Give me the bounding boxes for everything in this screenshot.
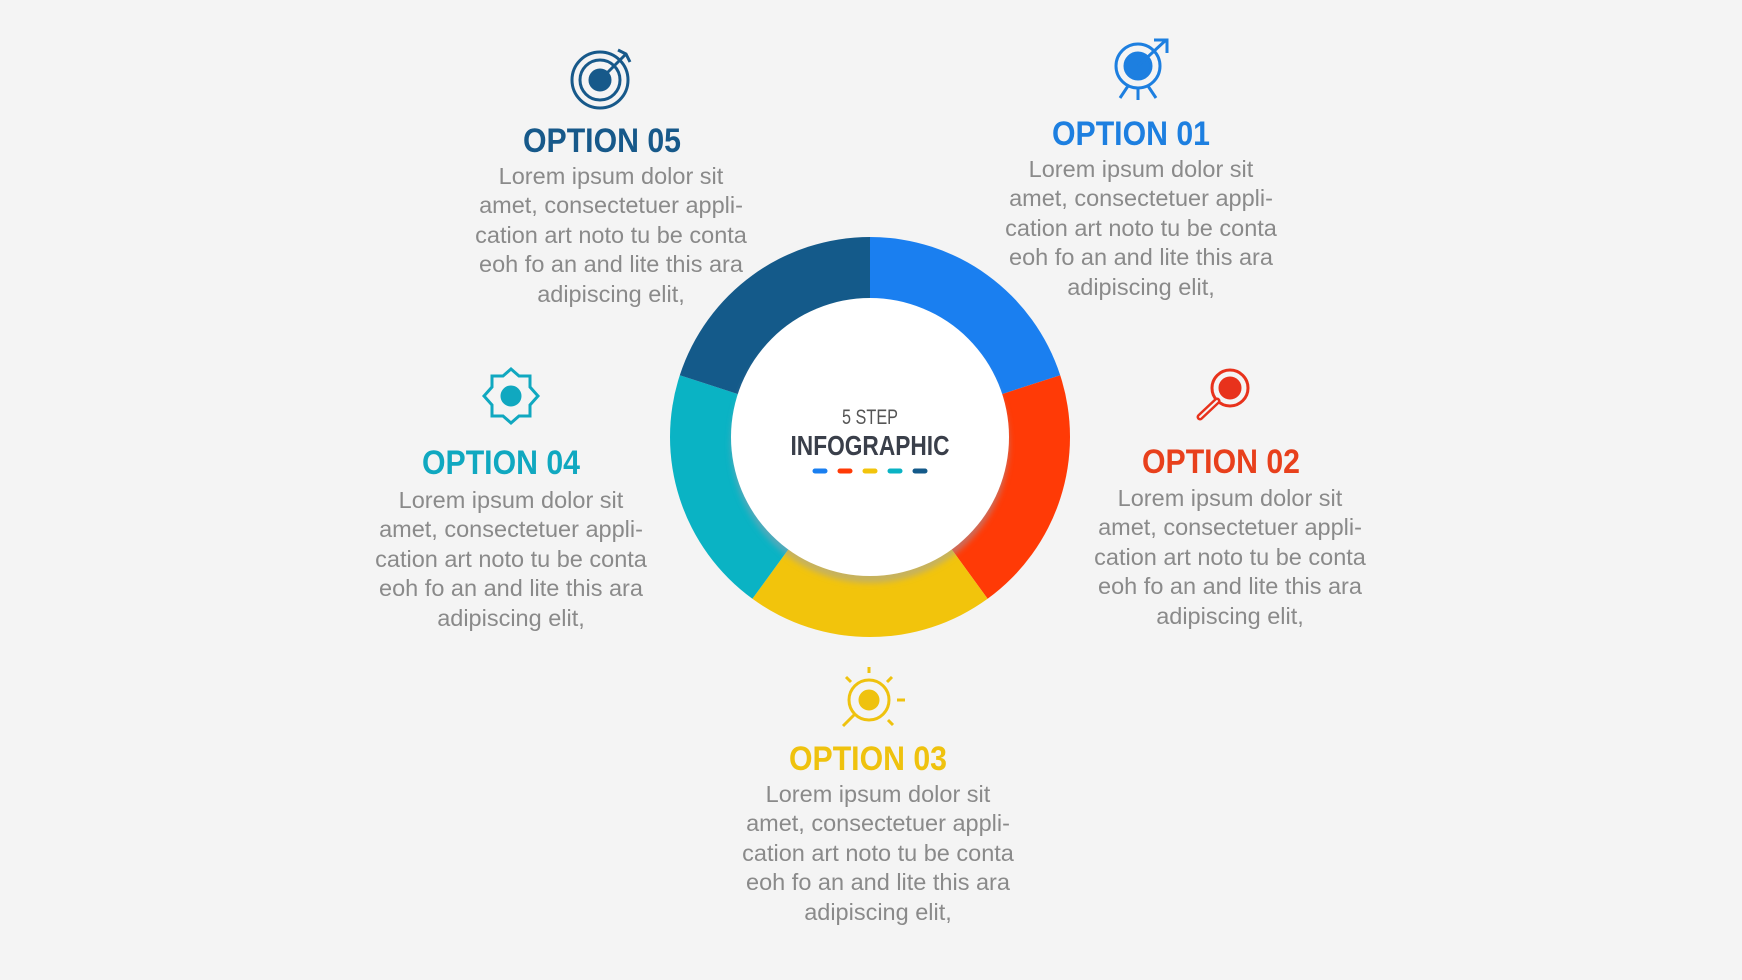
donut chart xyxy=(670,237,1070,637)
option 03 text: adipiscing elit, xyxy=(804,899,952,925)
option 01 text xyxy=(1005,115,1278,300)
icon: target (option 05) xyxy=(572,50,630,108)
option 02 text: adipiscing elit, xyxy=(1156,603,1304,629)
option 05 text: eoh fo an and lite this ara xyxy=(479,251,744,277)
option 04 text: adipiscing elit, xyxy=(437,605,585,631)
option 02 text: eoh fo an and lite this ara xyxy=(1098,573,1363,599)
option 01 text: Lorem ipsum dolor sit xyxy=(1029,156,1254,182)
segment: option 01 blue xyxy=(870,237,1060,437)
option 02 text: Lorem ipsum dolor sit xyxy=(1118,485,1343,511)
icon: gear (option 04) xyxy=(484,369,538,423)
option 04 text: OPTION 04 xyxy=(422,444,580,482)
segment: option 04 teal xyxy=(670,375,870,599)
segment: option 02 red xyxy=(870,375,1070,599)
segment: option 05 navy xyxy=(680,237,870,437)
center white circle xyxy=(731,298,1009,576)
center title: 5 STEP xyxy=(842,406,898,429)
option 03 text xyxy=(742,740,1015,925)
option 05 text: Lorem ipsum dolor sit xyxy=(499,163,724,189)
option 01 text: cation art noto tu be conta xyxy=(1005,215,1278,241)
option 05 text: amet, consectetuer appli- xyxy=(479,192,743,218)
option 05 text: adipiscing elit, xyxy=(537,281,685,307)
center title: INFOGRAPHIC xyxy=(790,430,950,461)
option 03 text: Lorem ipsum dolor sit xyxy=(766,781,991,807)
option 05 text xyxy=(475,122,748,307)
option 04 text xyxy=(375,444,648,631)
option 01 text: OPTION 01 xyxy=(1052,115,1210,153)
icon: light bulb (option 03) xyxy=(843,667,905,726)
option 04 text: Lorem ipsum dolor sit xyxy=(399,487,624,513)
color dashes xyxy=(815,468,925,474)
option 01 text: adipiscing elit, xyxy=(1067,274,1215,300)
icon: magnifier (option 02) xyxy=(1200,370,1248,417)
center title xyxy=(790,406,950,471)
option 03 text: cation art noto tu be conta xyxy=(742,840,1015,866)
option 05 text: cation art noto tu be conta xyxy=(475,222,748,248)
option 05 text: OPTION 05 xyxy=(523,122,681,160)
option 02 text: OPTION 02 xyxy=(1142,443,1300,481)
option 03 text: amet, consectetuer appli- xyxy=(746,810,1010,836)
icon: target with arrow (option 01) xyxy=(1116,40,1167,100)
option 01 text: amet, consectetuer appli- xyxy=(1009,185,1273,211)
option 01 text: eoh fo an and lite this ara xyxy=(1009,244,1274,270)
option 04 text: eoh fo an and lite this ara xyxy=(379,575,644,601)
option 03 text: OPTION 03 xyxy=(789,740,947,778)
option 04 text: amet, consectetuer appli- xyxy=(379,516,643,542)
option 02 text: cation art noto tu be conta xyxy=(1094,544,1367,570)
option 03 text: eoh fo an and lite this ara xyxy=(746,869,1011,895)
option 02 text xyxy=(1094,443,1367,629)
option 04 text: cation art noto tu be conta xyxy=(375,546,648,572)
segment: option 03 yellow xyxy=(752,437,988,637)
option 02 text: amet, consectetuer appli- xyxy=(1098,514,1362,540)
